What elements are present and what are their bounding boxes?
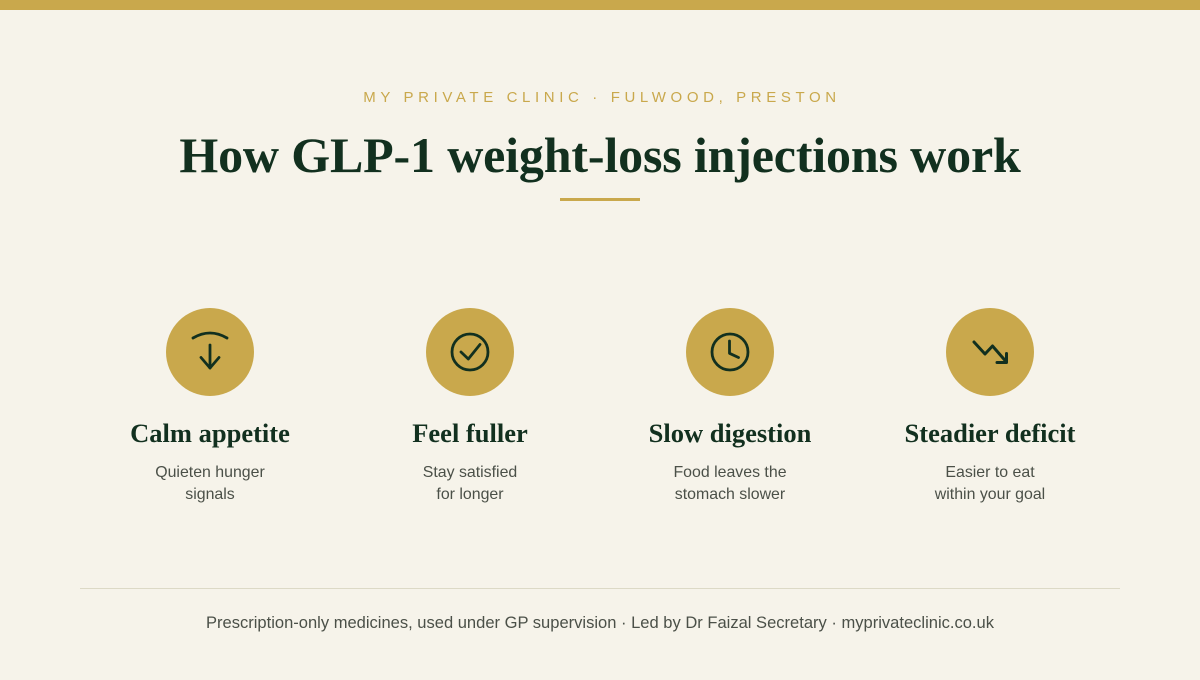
panel: slow digestion (649, 308, 811, 503)
panel: calm appetite (130, 308, 290, 503)
text: feel fuller description: Stay satisfied (423, 464, 517, 481)
heading: calm appetite: Calm appetite (130, 418, 290, 448)
text: slow digestion description (673, 464, 787, 503)
text: slow digestion description: Food leaves the (673, 464, 787, 481)
text: calm appetite description: Quieten hunger (155, 464, 265, 481)
text: steadier deficit description: within your goal (935, 486, 1045, 503)
heading: slow digestion: Slow digestion (649, 418, 811, 448)
heading: steadier deficit: Steadier deficit (904, 418, 1075, 448)
text: feel fuller description: for longer (436, 486, 504, 503)
text: slow digestion description: stomach slower (675, 486, 785, 503)
title: How GLP-1 weight-loss injections work (179, 127, 1021, 183)
heading: feel fuller: Feel fuller (412, 418, 528, 448)
icon: check in circle (426, 308, 514, 396)
text: feel fuller description (423, 464, 517, 503)
text: steadier deficit description (934, 464, 1045, 503)
text: steadier deficit description: Easier to eat (945, 464, 1035, 481)
panel: feel fuller (412, 308, 528, 503)
footer note: Prescription-only medicines, used under GP supervision · Led by Dr Faizal Secretary · myprivateclinic.co.uk (206, 613, 994, 632)
text: calm appetite description: signals (185, 486, 235, 503)
icon: trending down arrow (946, 308, 1034, 396)
text: calm appetite description (155, 464, 265, 503)
eyebrow: clinic name and location: MY PRIVATE CLINIC · FULWOOD, PRESTON (363, 89, 841, 106)
icon: arc with down arrow (166, 308, 254, 396)
icon: clock (686, 308, 774, 396)
top accent bar (0, 0, 1200, 10)
panel: steadier deficit (904, 308, 1076, 503)
title underline (560, 198, 640, 201)
